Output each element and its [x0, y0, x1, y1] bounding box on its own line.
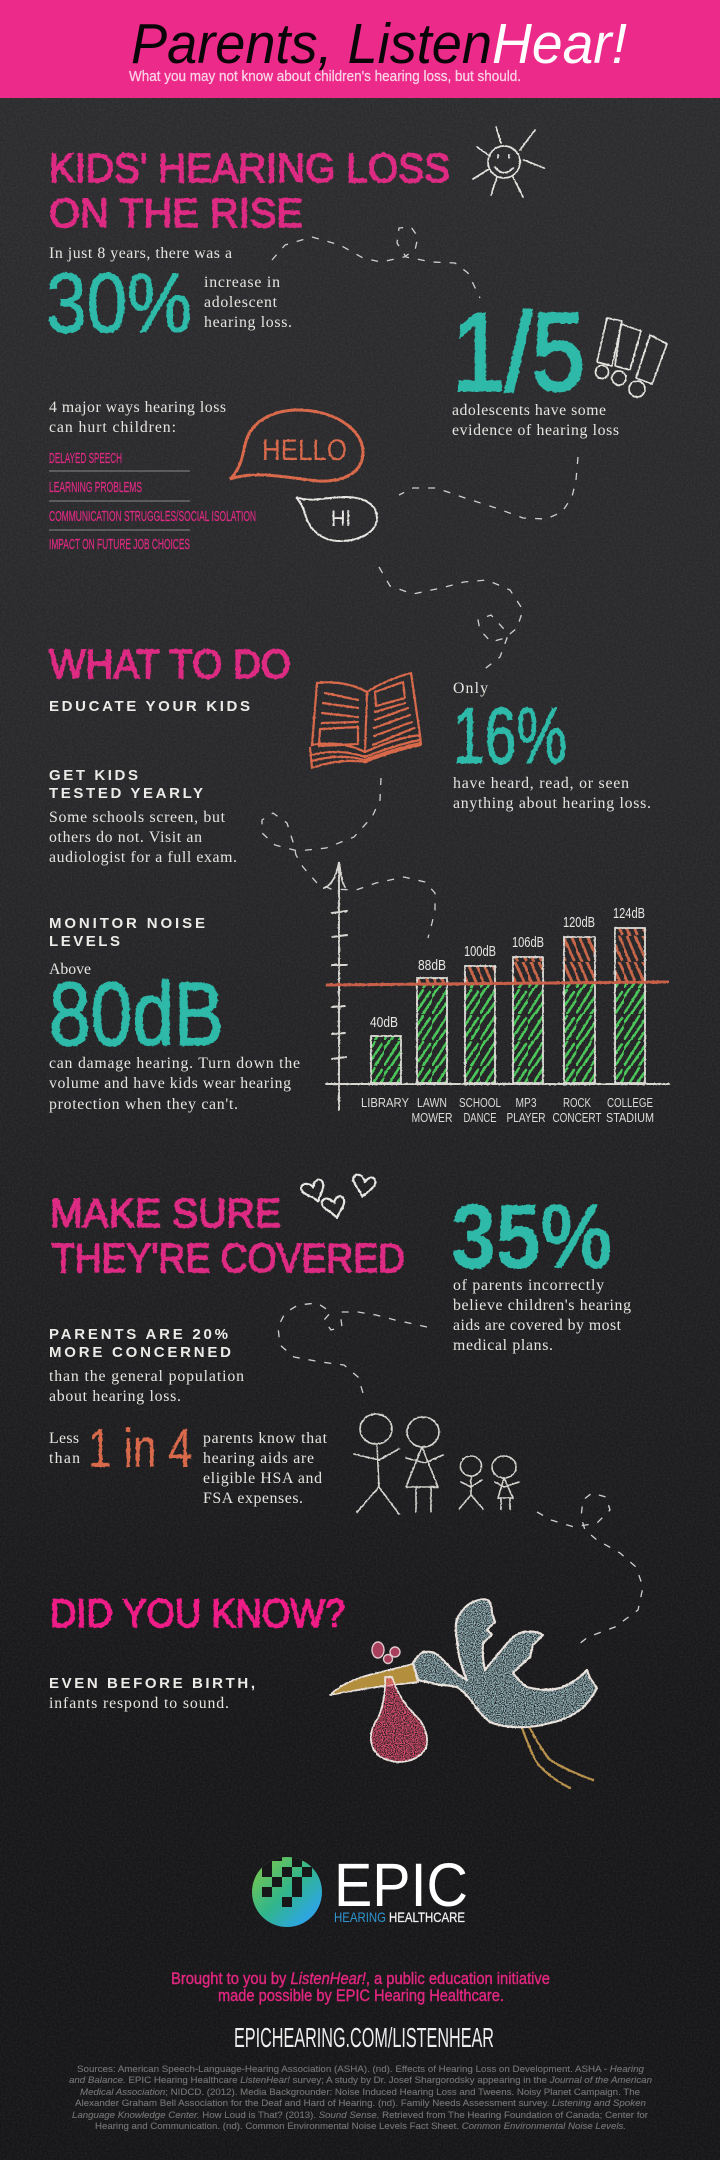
stat: less than 1 in 4 [49, 1417, 328, 1507]
heading: KIDS' HEARING LOSS [49, 145, 450, 191]
sources [69, 2064, 652, 2132]
stat: less than 1 in 4: Less [49, 1430, 79, 1447]
sources: Sources: American Speech-Language-Hearing Association (ASHA). (nd). Effects of Hearing Loss on Development. ASHA - Hearing [77, 2064, 645, 2075]
stat: 35%: 35% [451, 1186, 612, 1288]
category labels: MP3 [516, 1095, 536, 1110]
sources: Alexander Graham Bell Association for the Deaf and Hard of Hearing. (nd). Family Needs Assessment survey. Listening and Spoken [75, 2098, 646, 2109]
category labels: LAWN [417, 1095, 447, 1110]
stat description [452, 402, 619, 439]
stat description: medical plans. [453, 1337, 553, 1354]
category labels: DANCE [464, 1110, 497, 1125]
stat: only 16%: Only [453, 680, 488, 697]
stat: less than 1 in 4: hearing aids are [203, 1450, 314, 1467]
stork beak [330, 1664, 418, 1695]
heading: THEY'RE COVERED [52, 1235, 405, 1281]
subheading: monitor noise levels [49, 915, 205, 950]
dashed path 3 [379, 567, 523, 671]
value labels: 100dB [464, 943, 496, 960]
stat: less than 1 in 4: eligible HSA and [203, 1470, 322, 1487]
subheading: get kids tested yearly: GET KIDS [49, 767, 138, 784]
testing advice [49, 809, 237, 866]
footer [69, 1851, 652, 2132]
fact text: infants respond to sound. [49, 1695, 229, 1712]
stat: above 80dB [49, 961, 300, 1113]
four ways intro: 4 major ways hearing loss [49, 399, 226, 416]
stat description: adolescents have some [452, 402, 606, 419]
heading: DID YOU KNOW? [50, 1592, 345, 1636]
dashed path 2 [399, 457, 578, 519]
sources: and Balance. EPIC Hearing Healthcare ListenHear! survey; A study by Dr. Josef Shargorodsky appearing in the Journal of the American [69, 2075, 652, 2086]
stat description: aids are covered by most [453, 1317, 622, 1334]
subtitle: What you may not know about children's hearing loss, but should. [129, 69, 521, 85]
category labels: PLAYER [506, 1110, 546, 1125]
stat description: evidence of hearing loss [452, 422, 619, 439]
dashed path 6 [537, 1493, 643, 1648]
hatched bars [371, 928, 645, 1083]
logo wordmark: HEARING [334, 1909, 386, 1925]
category labels: STADIUM [606, 1110, 654, 1125]
heading: MAKE SURE [50, 1190, 281, 1236]
illustration: stick figure family [354, 1414, 519, 1514]
parents more concerned: about hearing loss. [49, 1388, 181, 1405]
stat: above 80dB: Above [49, 961, 91, 978]
fact text [49, 1675, 255, 1712]
attribution: made possible by EPIC Hearing Healthcare. [218, 1986, 504, 2005]
stat description [453, 1277, 631, 1354]
four ways intro: can hurt children: [49, 419, 176, 436]
testing advice: audiologist for a full exam. [49, 849, 237, 866]
attribution: Brought to you by ListenHear!, a public education initiative [171, 1969, 550, 1988]
stat description: adolescent [204, 294, 278, 311]
stat: only 16% [453, 680, 651, 812]
parents more concerned: than the general population [49, 1368, 244, 1385]
heading [50, 1190, 405, 1281]
heading [49, 145, 450, 236]
value labels: 88dB [418, 957, 446, 974]
stat: above 80dB: volume and have kids wear hearing [49, 1075, 291, 1092]
parents more concerned: MORE CONCERNED [49, 1344, 231, 1361]
section: did you know [49, 1592, 597, 1788]
category labels: MOWER [412, 1110, 452, 1125]
section: what to do [49, 641, 669, 1125]
list: ways hearing loss hurts children: COMMUNICATION STRUGGLES/SOCIAL ISOLATION [49, 509, 256, 525]
axes [324, 862, 669, 1110]
parents more concerned [49, 1326, 244, 1405]
value labels: 40dB [370, 1014, 398, 1031]
testing advice: Some schools screen, but [49, 809, 226, 826]
stat: less than 1 in 4: parents know that [203, 1430, 328, 1447]
icon: hearts [300, 1174, 376, 1220]
speech bubble: hi [296, 497, 377, 541]
testing advice: others do not. Visit an [49, 829, 202, 846]
stat: only 16%: anything about hearing loss. [453, 795, 651, 812]
speech bubble: hi: HI [331, 506, 351, 531]
icon: sun [473, 127, 544, 197]
stat: only 16%: have heard, read, or seen [453, 775, 629, 792]
stat: only 16%: 16% [453, 691, 567, 780]
heading: WHAT TO DO [49, 641, 291, 687]
stat: less than 1 in 4: FSA expenses. [203, 1490, 303, 1507]
category labels: ROCK [563, 1095, 591, 1110]
icon: open book [310, 673, 421, 768]
bar chart: noise levels [324, 862, 669, 1125]
sources: Language Knowledge Center. How Loud is That? (2013). Sound Sense. Retrieved from The Hearing Foundation of Canada; Center for [72, 2110, 649, 2121]
subheading: educate your kids: EDUCATE YOUR KIDS [49, 698, 250, 715]
stat description: increase in [204, 274, 280, 291]
stork body and wings [413, 1599, 597, 1727]
list: ways hearing loss hurts children: LEARNING PROBLEMS [49, 480, 142, 496]
category labels [361, 1095, 654, 1125]
stat: above 80dB: can damage hearing. Turn down the [49, 1055, 300, 1072]
list: ways hearing loss hurts children [49, 451, 256, 553]
value labels: 120dB [563, 914, 595, 931]
stat: above 80dB: 80dB [49, 965, 224, 1065]
section: kids' hearing loss on the rise [46, 127, 667, 671]
logo wordmark: EPIC [334, 1851, 468, 1919]
list: ways hearing loss hurts children: DELAYED SPEECH [49, 451, 122, 467]
dashed path 4 [262, 778, 435, 938]
heading: ON THE RISE [49, 190, 303, 236]
logo wordmark: HEALTHCARE [389, 1909, 465, 1925]
category labels: CONCERT [552, 1110, 602, 1125]
attribution [171, 1969, 550, 2005]
category labels: SCHOOL [459, 1095, 501, 1110]
speech bubble: hello [230, 410, 363, 481]
stat: above 80dB: protection when they can't. [49, 1096, 238, 1113]
title: Parents, Listen [131, 12, 492, 76]
value labels [370, 905, 645, 1031]
value labels: 124dB [613, 905, 645, 922]
category labels: LIBRARY [361, 1095, 409, 1110]
dashed path 1 [272, 227, 480, 298]
logo mark [252, 1857, 322, 1927]
illustration: stork carrying bundle [330, 1599, 597, 1788]
stat description: hearing loss. [204, 314, 292, 331]
stat description [204, 274, 292, 331]
website url: EPICHEARING.COM/LISTENHEAR [234, 2022, 494, 2053]
80dB threshold line [326, 982, 669, 985]
list: ways hearing loss hurts children: IMPACT ON FUTURE JOB CHOICES [49, 537, 190, 553]
stork legs [522, 1728, 593, 1788]
category labels: COLLEGE [607, 1095, 653, 1110]
four ways intro [49, 399, 226, 436]
subheading: get kids tested yearly [49, 767, 203, 802]
value labels: 106dB [512, 934, 544, 951]
stat: 1/5: 1/5 [452, 291, 585, 414]
sources: Medical Association; NIDCD. (2012). Media Backgrounder: Noise Induced Hearing Loss and Tweens. Noisy Planet Campaign. The [80, 2087, 640, 2098]
dashed path 5 [278, 1303, 427, 1393]
sources: Hearing and Communication. (nd). Common Environmental Noise Levels Fact Sheet. Common Environmental Noise Levels. [95, 2121, 626, 2132]
bundle bow [372, 1642, 400, 1664]
speech bubble: hello: HELLO [262, 434, 347, 467]
icon: exclamation marks [596, 318, 667, 397]
stat: 30%: 30% [46, 256, 192, 350]
title: Hear! [492, 12, 627, 76]
parents more concerned: PARENTS ARE 20% [49, 1326, 228, 1343]
stat: less than 1 in 4: than [49, 1450, 80, 1467]
subheading: monitor noise levels: LEVELS [49, 933, 120, 950]
header banner [0, 0, 720, 98]
fact text: EVEN BEFORE BIRTH, [49, 1675, 255, 1692]
subheading: monitor noise levels: MONITOR NOISE [49, 915, 205, 932]
stat intro text: In just 8 years, there was a [49, 245, 232, 262]
stat description: believe children's hearing [453, 1297, 631, 1314]
bundle [371, 1677, 427, 1762]
stat: less than 1 in 4: 1 in 4 [88, 1417, 192, 1479]
subheading: get kids tested yearly: TESTED YEARLY [49, 785, 203, 802]
section: make sure they're covered [49, 1174, 643, 1648]
stat description: of parents incorrectly [453, 1277, 604, 1294]
